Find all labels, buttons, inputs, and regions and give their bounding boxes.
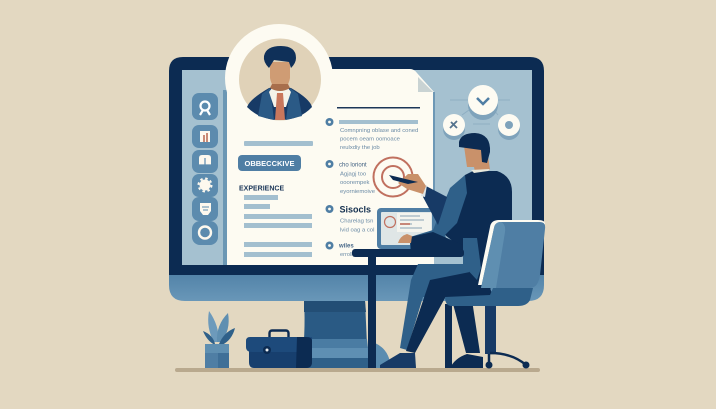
bullet 2 [326,160,367,168]
back shoe [450,354,483,368]
icon: ring [192,221,218,245]
status icons [443,85,520,140]
icon: chart [192,125,218,148]
typing hand [398,234,412,243]
bullet 1 [326,118,418,126]
icon: document [192,197,218,221]
icon: dot circle [498,114,520,140]
monitor frame [169,57,544,275]
details text: eyorniemoive [340,189,376,195]
front shoe [380,353,416,368]
sleeve panel [410,175,467,250]
laptop [377,208,439,249]
experience bars [244,195,312,257]
table [352,249,464,368]
skills text: Charelag tsn [340,218,373,224]
bullet 4: wiles [338,244,354,250]
icon: clock [192,150,218,173]
icon: check circle [468,85,498,120]
floor line [175,368,540,372]
details text: ooorempek [340,180,370,186]
typing arm [410,232,463,250]
pen [389,175,418,184]
right column rule [337,107,420,108]
neck and head [464,146,490,172]
icon: tools circle [443,114,465,140]
bullet 3 [326,204,371,214]
skills text: lvid oag a col [340,228,374,234]
torso [445,171,512,289]
chair [445,220,545,368]
briefcase [246,330,312,368]
resume document [227,69,434,265]
pointing arm [423,186,450,225]
objective badge: OBBECCKIVE [244,159,295,168]
details text: Agjagj too [340,172,367,178]
skills text [340,218,374,234]
target circle [374,158,412,196]
summary text: Comnpning oblase and coned [340,128,418,134]
name bar [244,141,313,146]
pointing hand [398,174,426,194]
chair back [478,220,545,285]
details text [340,172,376,195]
objective badge [238,155,301,171]
page fold [418,77,433,92]
summary text [340,128,418,151]
monitor chin [169,270,544,301]
chair seat [445,288,533,306]
front leg [400,264,493,350]
chair legs and base [445,304,530,368]
person [380,133,512,368]
portrait [247,46,312,120]
screen background [182,70,532,265]
sidebar divider [223,90,227,265]
icon: person [192,93,218,120]
monitor bottom edge [169,265,544,275]
plant [203,311,235,368]
icon: gear [192,174,218,197]
waist panel [463,238,481,280]
monitor stand [300,300,391,368]
shirt collar [471,169,490,173]
profile photo [225,24,333,132]
summary text: pocem oeam oomoace [340,136,401,142]
experience heading: EXPERIENCE [239,186,284,192]
summary text: reulxdiy the job [340,145,380,151]
bullet 3: Sisocls [340,204,371,214]
bullet 4: erroll [340,252,352,258]
sidebar icons [192,93,218,245]
bullet 4 [326,242,354,258]
back leg [452,300,480,353]
bullet 2: cho loriont [339,162,367,168]
